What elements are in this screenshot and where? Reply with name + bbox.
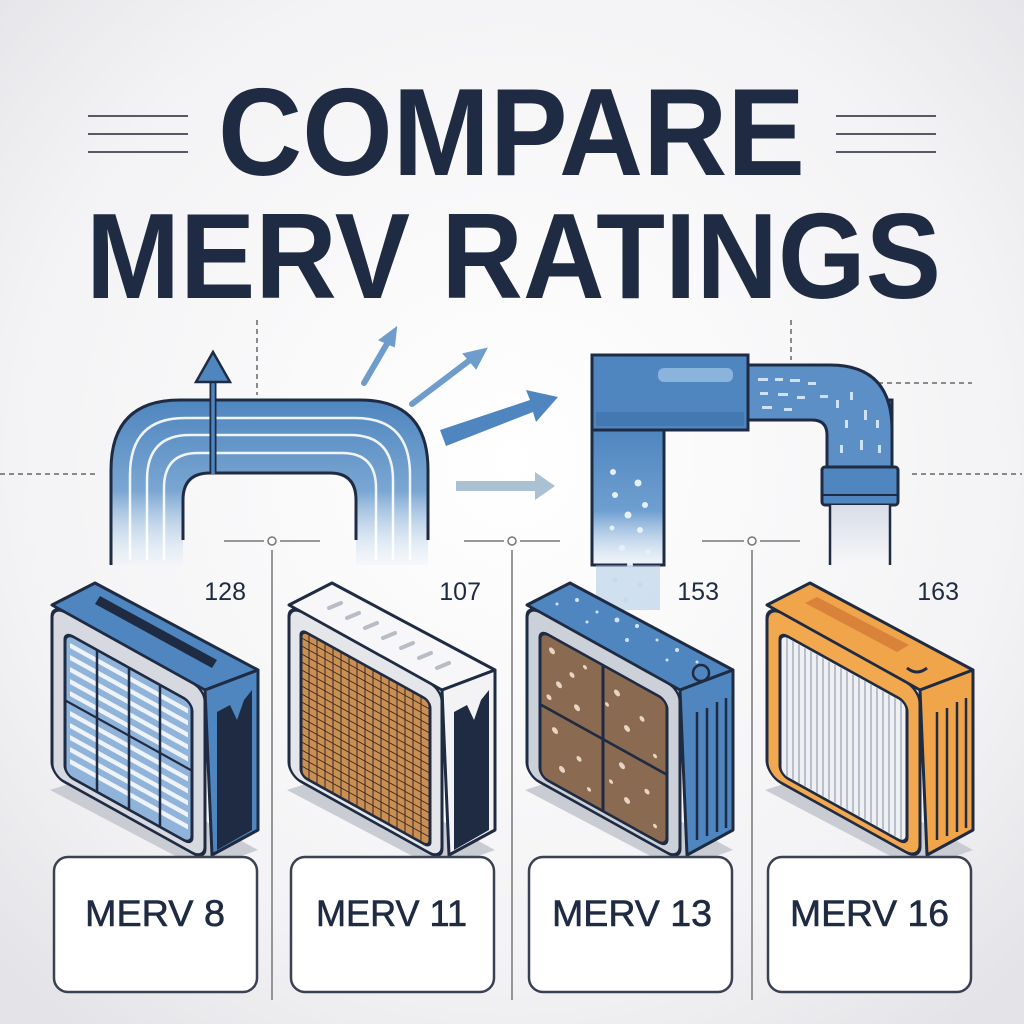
label: MERV 8 <box>54 857 257 992</box>
title: COMPARE <box>218 64 805 202</box>
label: MERV 11: MERV 11 <box>316 893 467 934</box>
label: MERV 13 <box>529 857 732 992</box>
rating numbers: 153 <box>677 578 719 606</box>
label: MERV 11 <box>291 857 494 992</box>
faucet and elbow pipe <box>592 355 898 610</box>
U-shaped duct <box>111 400 428 565</box>
filter: MERV 11 <box>287 583 495 870</box>
rating numbers: 107 <box>439 578 481 606</box>
label: MERV 8: MERV 8 <box>85 893 225 934</box>
title <box>86 64 941 324</box>
airflow arrows <box>364 328 558 500</box>
filter: MERV 16 <box>765 583 973 870</box>
guide dashes <box>0 320 1022 474</box>
rating numbers <box>204 578 959 606</box>
filter: MERV 13 <box>525 583 733 870</box>
label: MERV 13: MERV 13 <box>552 893 712 934</box>
rating numbers: 128 <box>204 578 246 606</box>
title decorative lines <box>88 116 936 152</box>
label: MERV 16: MERV 16 <box>790 893 949 934</box>
label: MERV 16 <box>768 857 971 992</box>
column separators with nodes <box>224 537 800 1000</box>
title: MERV RATINGS <box>86 188 941 324</box>
rating numbers: 163 <box>917 578 959 606</box>
icon: up arrow on duct <box>196 352 230 474</box>
filter: MERV 8 <box>50 583 258 870</box>
